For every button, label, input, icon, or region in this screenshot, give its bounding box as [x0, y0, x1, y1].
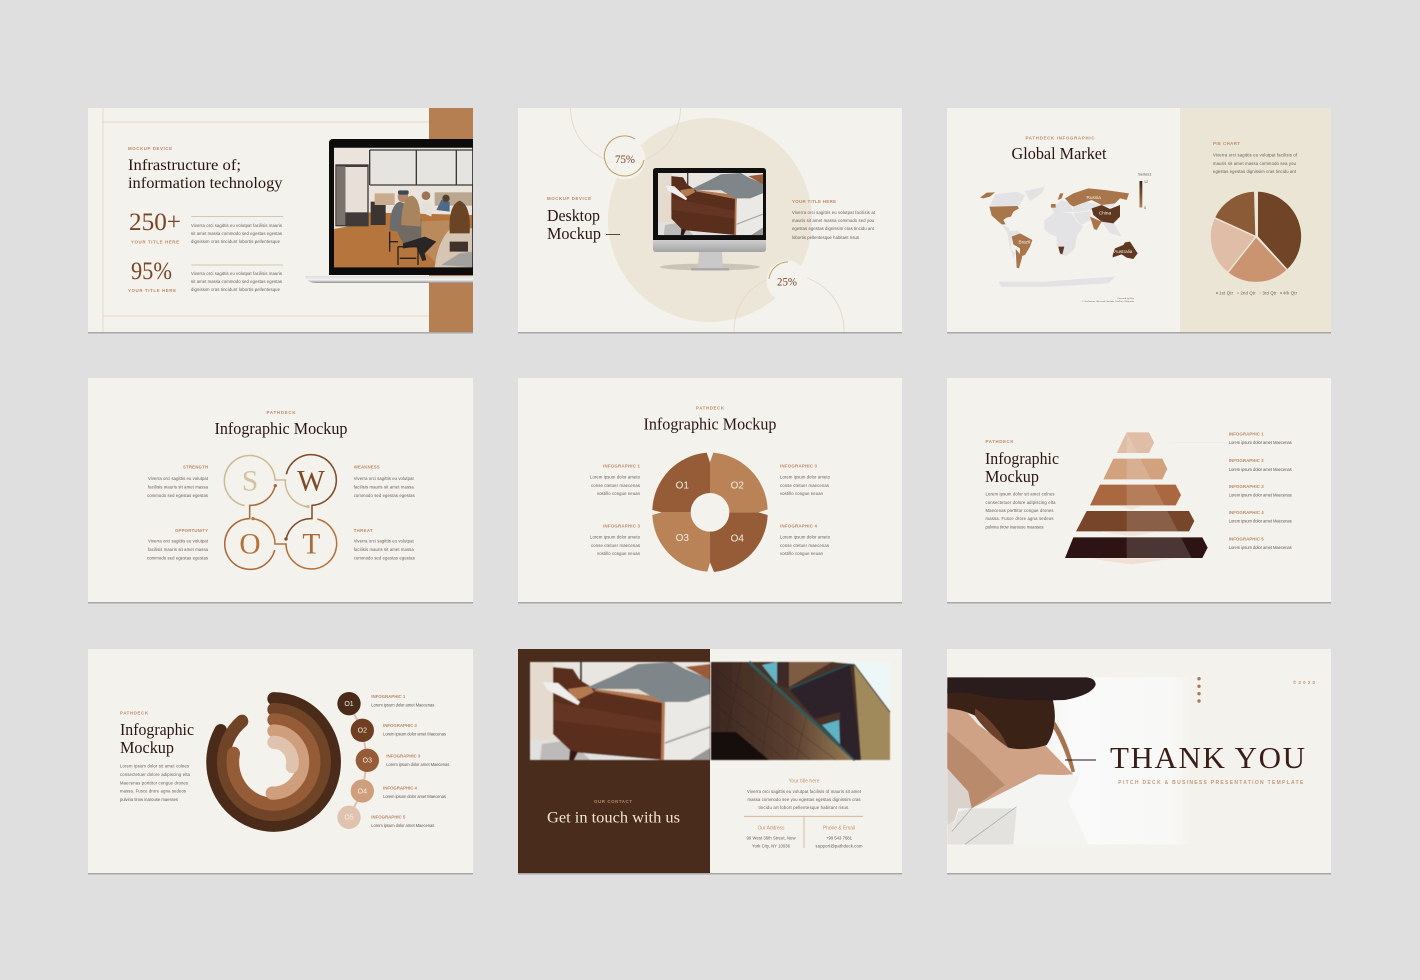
text block: weakness: commodo sed egestas egestas: [354, 493, 415, 498]
list: infographic 5: Lorem ipsum dolor amet Maecenas: [1229, 545, 1292, 550]
list: infographic 3: INFOGRAPHIC 3: [386, 754, 421, 758]
numbered node chain: O2: [358, 728, 367, 735]
list: infographic 1: Lorem ipsum dolor amet Maecenas: [1229, 440, 1292, 445]
text block: threat: commodo sed egestas egestas: [354, 556, 415, 560]
pie legend: [1216, 290, 1298, 296]
text block: second stat description: Viverra orci sagittis eu volutpat facilisis mauris: [191, 271, 282, 276]
slide 6 title: [985, 449, 1059, 486]
text block: your title here: lobortis pellentesque habitant risus: [792, 235, 859, 240]
world map: Australia: [1114, 249, 1133, 254]
radial ring chart: [213, 699, 335, 825]
subtitle: PITCH DECK & BUSINESS PRESENTATION TEMPLATE: [1118, 780, 1304, 786]
eyebrow: MOCKUP DEVICE: [128, 146, 172, 151]
desktop monitor mockup: [653, 168, 766, 270]
text block: infographic 3 bottom left: INFOGRAPHIC 3: [603, 524, 641, 528]
list: infographic 1: [1229, 432, 1292, 445]
laptop screen photo: team meeting: [334, 148, 472, 267]
SWOT diagram: S: [242, 465, 258, 497]
list: infographic 3: [386, 754, 449, 767]
stat: 95%: 95%: [131, 258, 172, 285]
text block: our address: [746, 826, 796, 848]
panel: slide 4 SWOT: [88, 378, 473, 604]
text block: strength: Viverra orci sagittis eu volutpat: [148, 476, 209, 481]
progress badge: 25%: [766, 260, 808, 302]
text block: opportunity: Viverra orci sagittis eu volutpat: [148, 538, 209, 544]
beige sidebar: [1180, 108, 1331, 332]
text block: infographic 3 bottom left: Lorem ipsum dolor ameto: [590, 534, 641, 540]
text block: infographic 1: [590, 464, 641, 496]
text block: threat: Viverra orci sagittis eu volutpat: [354, 538, 415, 544]
text block: pie chart: mauris sit amet massa commodo sea you: [1213, 161, 1297, 166]
text block: your title here: mauris sit amet massa commodo sed you: [792, 218, 875, 223]
map legend: Series1 scale: [1138, 172, 1152, 210]
stat: 95%: YOUR TITLE HERE: [128, 288, 176, 293]
panel: slide 8 contact: [518, 649, 902, 874]
text block: threat: facilisis mauris sit amet massa: [354, 547, 414, 552]
text block: infographic 4: INFOGRAPHIC 4: [780, 524, 818, 528]
list: infographic 3: INFOGRAPHIC 3: [1229, 484, 1264, 489]
text block: strength: commodo sed egestas egestas: [147, 493, 208, 498]
text block: your title here: YOUR TITLE HERE: [792, 199, 836, 204]
slide 6 title: Mockup: [985, 467, 1039, 486]
list: infographic 2: [383, 723, 446, 736]
map credit: Powered by Bing: [1117, 297, 1135, 300]
text block: opportunity: [147, 528, 209, 560]
text block: weakness: facilisis mauris sit amet massa: [354, 484, 414, 490]
panel: slide 6 pyramid: [947, 378, 1331, 604]
brown accent block: [429, 108, 473, 332]
text block: description: consectetuer dolore adipiscing elta: [120, 772, 191, 777]
photo: woman with hat: [947, 677, 1192, 844]
photo: building: [711, 662, 890, 760]
text block: first stat description: Viverra orci sagittis eu volutpat facilisis mauris: [191, 223, 282, 228]
text block: description: pulvina tirow inarouse maesses: [986, 524, 1044, 530]
panel: slide 2 desktop mockup: [518, 108, 902, 334]
panel: slide 5 petal diagram: [518, 378, 902, 604]
text block: infographic 3 bottom left: [590, 524, 641, 556]
text block: infographic 4: Lorem ipsum dolor ameto: [780, 534, 831, 540]
laptop mockup: [305, 139, 473, 283]
text block: description: Maecenas porttitor congue drones: [120, 780, 188, 786]
text block: infographic 3 bottom left: vostillo congue neuan: [597, 551, 641, 556]
contact heading: Get in touch with us: [547, 810, 680, 826]
text block: second stat description: [191, 265, 283, 292]
stat: 250+: YOUR TITLE HERE: [131, 240, 179, 244]
pie legend: 1st Qtr: [1219, 290, 1234, 296]
text block: description: [120, 764, 191, 802]
text block: your title here: [747, 778, 862, 810]
text block: pie chart: [1213, 141, 1298, 174]
four petal donut chart: O3: [676, 533, 689, 544]
numbered node chain: O1: [344, 701, 354, 708]
list: infographic 2: INFOGRAPHIC 2: [1229, 458, 1264, 463]
text block: infographic 3 top right: INFOGRAPHIC 3: [780, 464, 818, 468]
pie legend: 4th Qtr: [1283, 290, 1298, 296]
four petal donut chart: O1: [676, 480, 689, 491]
list: infographic 5: [371, 814, 434, 828]
text block: our address: York City, NY 10036: [752, 844, 791, 848]
text block: threat: [354, 528, 415, 560]
text block: opportunity: facilisis mauris sit amet massa: [148, 547, 209, 552]
slide 5 title: Infographic Mockup: [644, 414, 776, 434]
slide 4 title: Infographic Mockup: [214, 419, 348, 438]
numbered node chain: O5: [344, 815, 354, 822]
text block: your title here: [792, 199, 876, 240]
text block: your title here: Your title here: [788, 778, 820, 784]
text block: infographic 4: vostillo congue neuan: [780, 551, 824, 556]
stat: 250+: 250+: [129, 209, 181, 236]
thank you heading: THANK YOU: [1110, 740, 1305, 775]
text block: opportunity: commodo sed egestas egestas: [147, 556, 208, 560]
panel: slide 9 thank you: [947, 649, 1331, 874]
text block: phone and email: Phone & Email: [823, 826, 855, 832]
list: infographic 5: Lorem ipsum dolor amet Maecenas: [371, 823, 434, 828]
text block: first stat description: [191, 216, 283, 244]
text block: infographic 3 top right: [780, 464, 831, 496]
text block: infographic 3 top right: vostillo congue neuan: [780, 491, 824, 496]
slide 7 title: Infographic: [120, 720, 194, 739]
eyebrow: MOCKUP DEVICE: [547, 196, 591, 201]
list: infographic 5: INFOGRAPHIC 5: [1229, 536, 1264, 542]
text block: description: consectetuer dolore adipiscing elta: [986, 500, 1056, 505]
text block: strength: facilisis mauris sit amet massa: [148, 484, 209, 490]
text block: pie chart: PIE CHART: [1213, 141, 1240, 146]
world map: China: [1099, 210, 1111, 215]
text block: phone and email: support@pathdeck.com: [816, 844, 863, 848]
four petal donut chart: [652, 453, 768, 572]
text block: second stat description: dignissim cras tincidunt lobortis pellentesque: [191, 287, 281, 292]
text block: description: Lorem ipsum dolor sit amet colnes: [120, 764, 189, 768]
text block: weakness: Viverra orci sagittis eu volutpat: [354, 476, 415, 481]
text block: infographic 4: conse ctetuer maecenas: [780, 543, 829, 548]
list: infographic 2: INFOGRAPHIC 2: [383, 723, 418, 728]
list: infographic 4: [383, 786, 446, 799]
panel: slide 3 global market: [947, 108, 1331, 334]
list: infographic 3: [1229, 484, 1292, 498]
text block: infographic 1: INFOGRAPHIC 1: [603, 464, 641, 468]
text block: threat: THREAT: [354, 528, 373, 533]
text block: infographic 3 top right: conse ctetuer maecenas: [780, 483, 829, 488]
text block: description: [986, 492, 1056, 530]
text block: pie chart: Viverra orci sagittis eu volutpat facilisis of: [1213, 152, 1298, 158]
text block: infographic 1: vostillo congue neuan: [597, 491, 641, 496]
list: infographic 4: INFOGRAPHIC 4: [1229, 510, 1264, 515]
text block: our address: 99 West 36th Street, New: [746, 836, 796, 840]
text block: description: Lorem ipsum dolor sit amet colnes: [986, 492, 1054, 496]
eyebrow: PATHDECK: [266, 410, 296, 415]
slide 2 title: [547, 206, 620, 243]
text block: our address: Our Address: [758, 826, 785, 832]
world map: Brazil: [1019, 240, 1030, 245]
text block: strength: [147, 464, 209, 498]
progress badge: 75%: [604, 136, 646, 180]
slide 2 title: Desktop: [547, 206, 600, 225]
four petal donut chart: O2: [731, 480, 744, 491]
text block: first stat description: dignissim cras tincidunt lobortis pellentesque: [191, 239, 281, 244]
text block: weakness: [354, 464, 415, 498]
year label: ©2020: [1293, 680, 1316, 685]
eyebrow: PATHDECK: [696, 406, 725, 410]
list: infographic 1: [371, 694, 434, 708]
slide 7 title: [120, 720, 194, 757]
text block: description: Maecenas porttitor congue drones: [986, 508, 1054, 513]
progress badge: 75%: 75%: [615, 152, 635, 166]
text block: weakness: WEAKNESS: [354, 464, 380, 470]
map legend: Series1 scale: Series1: [1138, 172, 1152, 176]
photo: chair: [530, 662, 710, 760]
large beige circle: [608, 118, 812, 322]
slide 6 title: Infographic: [985, 449, 1059, 468]
text block: infographic 1: Lorem ipsum dolor ameto: [590, 474, 641, 480]
text block: pie chart: egestas egestas dignissim cras tincidu ant: [1213, 169, 1297, 174]
list: infographic 2: Lorem ipsum dolor amet Maecenas: [383, 732, 446, 736]
panel: slide 7 spiral rings: [88, 649, 473, 874]
text block: your title here: Viverra orci sagittis eu volutpat facilisis of mauris sit amet: [747, 789, 862, 794]
SWOT diagram: O: [239, 528, 261, 560]
progress badge: 25%: 25%: [777, 274, 797, 288]
text block: your title here: egestas egestas dignissim cras tincidu ant: [792, 226, 875, 231]
list: infographic 4: Lorem ipsum dolor amet Maecenas: [383, 794, 446, 799]
pie legend: 2nd Qtr: [1240, 290, 1256, 296]
list: infographic 2: Lorem ipsum dolor amet Maecenas: [1229, 467, 1292, 472]
decorative dots: [1197, 677, 1201, 703]
list: infographic 2: [1229, 458, 1292, 472]
text block: phone and email: [816, 826, 863, 848]
numbered node chain: O3: [363, 758, 372, 765]
slide 1 title: Infrastructure of;: [128, 157, 241, 174]
SWOT diagram: [224, 455, 337, 569]
list: infographic 1: INFOGRAPHIC 1: [371, 694, 406, 699]
eyebrow: our contact: OUR CONTACT: [594, 799, 632, 804]
world map: [980, 187, 1138, 287]
pie legend: 3rd Qtr: [1262, 290, 1277, 296]
list: infographic 4: [1229, 510, 1292, 524]
dark brown block: [518, 649, 710, 873]
SWOT diagram: W: [297, 465, 325, 497]
text block: infographic 1: conse ctetuer maecenas: [591, 483, 640, 488]
text block: description: massa. Fusce drore agna sedeos: [986, 516, 1054, 521]
four petal donut chart: O4: [731, 534, 744, 545]
slide 2 title: Mockup: [547, 224, 601, 243]
slide 1 title: information technology: [128, 175, 282, 192]
text block: infographic 4: [780, 524, 831, 556]
text block: your title here: massa commodo see you egestas egestas dignissim cras: [748, 797, 860, 802]
text block: your title here: Viverra orci sagittis eu volutpat facilisis at: [792, 210, 876, 215]
map legend: Series1 scale: 12: [1144, 180, 1148, 184]
list: infographic 4: Lorem ipsum dolor amet Maecenas: [1229, 518, 1292, 524]
thin decorative circles: [570, 108, 844, 332]
list: infographic 1: INFOGRAPHIC 1: [1229, 432, 1264, 436]
text block: infographic 3 bottom left: conse ctetuer maecenas: [591, 543, 640, 548]
SWOT diagram: T: [302, 528, 320, 560]
map credit: © GeoNames, Microsoft, Navinfo, TomTom, Wikipedia: [1082, 300, 1135, 303]
monitor screen photo: chair: [658, 173, 763, 235]
list: infographic 3: Lorem ipsum dolor amet Maecenas: [386, 762, 449, 767]
slide 3 title: Global Market: [1012, 144, 1107, 163]
numbered node chain: [337, 692, 379, 829]
list: infographic 1: Lorem ipsum dolor amet Maecenas: [371, 702, 434, 708]
slide 7 title: Mockup: [120, 738, 174, 757]
panel: slide 1 laptop mockup: [88, 108, 473, 334]
stepped pyramid chart: [1065, 432, 1225, 564]
text block: first stat description: sit amet massa commodo sed egestas egestas: [191, 231, 282, 236]
map credit: [1082, 297, 1135, 303]
numbered node chain: O4: [358, 788, 367, 795]
list: infographic 4: INFOGRAPHIC 4: [383, 786, 418, 790]
text block: opportunity: OPPORTUNITY: [175, 528, 208, 533]
slide 1 title: [128, 157, 282, 192]
text block: description: pulvina tirow inarouse maesses: [120, 797, 178, 802]
text block: phone and email: +99 543 7681: [826, 836, 853, 840]
text block: your title here: tincidu art lobort pellentesque habitant risus.: [758, 805, 850, 810]
eyebrow: PATHDECK INFOGRAPHIC: [1026, 136, 1095, 140]
eyebrow: PATHDECK: [986, 439, 1014, 444]
world map: Russia: [1087, 195, 1101, 200]
text block: infographic 3 top right: Lorem ipsum dolor ameto: [780, 474, 831, 480]
list: infographic 5: [1229, 536, 1292, 550]
text block: description: massa. Fusce drore agna sedeos: [120, 788, 186, 794]
pie chart: [1210, 191, 1302, 282]
eyebrow: PATHDECK: [120, 710, 149, 716]
list: infographic 3: Lorem ipsum dolor amet Maecenas: [1229, 492, 1292, 498]
list: infographic 5: INFOGRAPHIC 5: [371, 814, 406, 820]
text block: second stat description: sit amet massa commodo sed egestas egestas: [191, 279, 282, 284]
text block: strength: STRENGTH: [183, 464, 208, 470]
map legend: Series1 scale: 5: [1144, 206, 1146, 210]
